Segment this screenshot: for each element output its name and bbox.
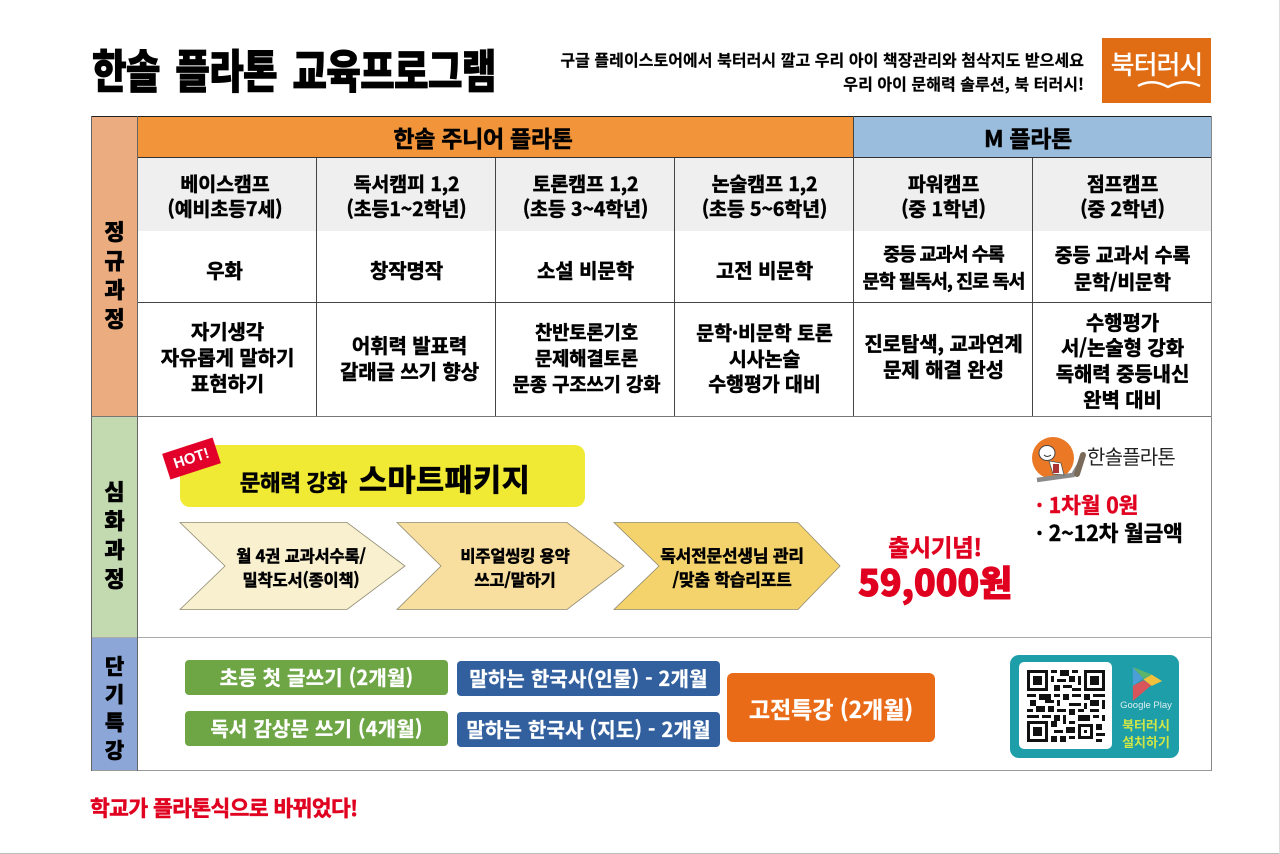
reading: 중등 교과서 수록 1: 문학 필독서, 진로 독서 bbox=[863, 268, 1024, 294]
chevron process bbox=[179, 522, 840, 610]
Google Play label: Google Play bbox=[1120, 700, 1172, 711]
row label: 단기특강: 단 bbox=[105, 650, 124, 680]
banner: 스마트패키지 bbox=[180, 445, 585, 507]
course: 말하는 한국사 지도: 말하는 한국사 (지도) - 2개월 bbox=[466, 714, 711, 743]
row label: 정규과정: 정 bbox=[104, 214, 125, 246]
banner: 스마트패키지: 문해력 강화 bbox=[240, 466, 347, 498]
badge: HOT!: HOT! bbox=[171, 445, 212, 472]
skills: 토론캠프: 찬반토론기호 bbox=[535, 318, 638, 345]
skills: 독서캠피: 어휘력 발표력 bbox=[352, 330, 467, 359]
skills: 논술캠프 bbox=[696, 317, 833, 397]
skills: 파워캠프: 문제 해결 완성 bbox=[883, 354, 1004, 383]
skills: 점프캠프: 서/논술형 강화 bbox=[1061, 332, 1184, 361]
logo: 한솔플라톤 mascot bbox=[1032, 437, 1086, 482]
promo text: 구글 플레이스토어에서 북터러시 깔고 우리 아이 책장관리와 첨삭지도 받으세요 bbox=[560, 47, 1084, 71]
reading: 우화: 우화 bbox=[206, 255, 243, 284]
skills: 토론캠프: 문종 구조쓰기 강화 bbox=[513, 370, 660, 397]
banner: 스마트패키지: 스마트패키지 bbox=[359, 456, 530, 500]
panel: regular courses bbox=[92, 117, 1211, 416]
camp: 파워캠프: (중 1학년) bbox=[901, 193, 986, 222]
skills: 독서캠피 bbox=[340, 330, 479, 384]
camp: 점프캠프: 점프캠프 bbox=[1087, 168, 1158, 197]
pricing notes bbox=[1036, 489, 1183, 548]
footer slogan: 학교가 플라톤식으로 바뀌었다! bbox=[90, 792, 358, 823]
skills: 논술캠프: 수행평가 대비 bbox=[708, 368, 821, 397]
promo text bbox=[560, 47, 1084, 95]
row label: 정규과정: 규 bbox=[104, 244, 125, 276]
camp: 파워캠프 bbox=[901, 168, 986, 222]
reading: 중등 교과서 수록 2: 중등 교과서 수록 bbox=[1055, 238, 1190, 268]
row label: 정규과정: 과 bbox=[104, 272, 125, 304]
camp: 토론캠프: (초등 3~4학년) bbox=[523, 193, 648, 222]
reading: 창작명작: 창작명작 bbox=[370, 255, 443, 284]
skills: 베이스캠프 bbox=[160, 316, 294, 397]
row label: 심화과정: 화 bbox=[104, 504, 125, 536]
camp: 파워캠프: 파워캠프 bbox=[908, 168, 979, 197]
label: 출시기념: 출시기념! bbox=[888, 529, 982, 563]
step 3 text: /맞춤 학습리포트 bbox=[672, 566, 792, 591]
row label: 정규과정 bbox=[91, 116, 138, 417]
badge: HOT! bbox=[162, 437, 221, 480]
skills: 파워캠프: 진로탐색, 교과연계 bbox=[864, 328, 1023, 357]
reading: 소설 비문학: 소설 비문학 bbox=[537, 255, 634, 284]
install text: 설치하기 bbox=[1122, 732, 1170, 751]
course: 초등 첫 글쓰기 bbox=[185, 660, 448, 695]
row label: 심화과정: 과 bbox=[104, 533, 125, 565]
chevron 2 bbox=[397, 522, 624, 610]
skills: 논술캠프: 문학·비문학 토론 bbox=[696, 317, 833, 346]
skills: 베이스캠프: 자유롭게 말하기 bbox=[161, 342, 294, 371]
install text: 북터러시 bbox=[1122, 715, 1170, 734]
camp: 독서캠피 bbox=[346, 168, 467, 222]
reading: 고전 비문학: 고전 비문학 bbox=[716, 255, 813, 284]
QR code bbox=[1019, 662, 1112, 749]
chevron 3 bbox=[614, 522, 840, 610]
logo: 북터러시 bbox=[1102, 38, 1211, 103]
skills: 점프캠프: 완벽 대비 bbox=[1083, 384, 1162, 413]
icon: Google Play bbox=[1132, 667, 1162, 701]
step 1 text: 월 4권 교과서수록/ bbox=[236, 543, 366, 567]
course: 고전특강 bbox=[727, 673, 935, 742]
install text bbox=[1122, 715, 1170, 751]
row label: 단기특강: 기 bbox=[105, 678, 124, 708]
header: M 플라톤 bbox=[854, 116, 1212, 158]
reading: 중등 교과서 수록 2: 문학/비문학 bbox=[1074, 266, 1171, 294]
logo: 북터러시: 북터러시 bbox=[1111, 44, 1202, 82]
course: 독서 감상문 쓰기 bbox=[185, 711, 448, 746]
step 2 text: 쓰고/말하기 bbox=[474, 567, 556, 591]
promo text: 우리 아이 문해력 솔루션, 북 터러시! bbox=[843, 71, 1084, 95]
skills: 토론캠프: 문제해결토론 bbox=[535, 344, 638, 371]
header: 한솔 주니어 플라톤: 한솔 주니어 플라톤 bbox=[393, 120, 573, 154]
skills: 베이스캠프: 표현하기 bbox=[191, 368, 264, 397]
header: M 플라톤: M 플라톤 bbox=[984, 120, 1072, 154]
camp: 논술캠프 bbox=[702, 168, 827, 222]
price callout bbox=[858, 529, 1012, 607]
step 1 text bbox=[236, 543, 366, 591]
camp: 베이스캠프: 베이스캠프 bbox=[180, 168, 270, 197]
camp: 점프캠프: (중 2학년) bbox=[1080, 193, 1165, 222]
skills row bbox=[160, 307, 1189, 413]
row label: 정규과정: 정 bbox=[104, 302, 125, 334]
course: 초등 첫 글쓰기: 초등 첫 글쓰기 (2개월) bbox=[220, 662, 413, 691]
step 2 text bbox=[460, 543, 570, 591]
logo text: 한솔플라톤: 한솔플라톤 bbox=[1087, 441, 1175, 470]
camp: 베이스캠프 bbox=[167, 168, 283, 222]
note: 2~12차: · 2~12차 월금액 bbox=[1036, 517, 1183, 548]
price: 59,000원 bbox=[858, 555, 1012, 607]
skills: 논술캠프: 시사논술 bbox=[729, 343, 800, 372]
row label: 단기특강: 특 bbox=[105, 706, 124, 736]
row label: 심화과정 bbox=[92, 417, 137, 637]
camp: 독서캠피: (초등1~2학년) bbox=[346, 193, 467, 222]
row label: 단기특강: 강 bbox=[105, 734, 124, 764]
course: 고전특강: 고전특강 (2개월) bbox=[749, 690, 913, 724]
header: 한솔 주니어 플라톤 bbox=[138, 116, 854, 158]
camp: 베이스캠프: (예비초등7세) bbox=[167, 193, 283, 222]
reading: 중등 교과서 수록 1: 중등 교과서 수록 bbox=[883, 240, 1004, 266]
step 3 text bbox=[660, 542, 804, 591]
title: 한솔 플라톤 교육프로그램 bbox=[92, 36, 496, 102]
skills: 파워캠프 bbox=[864, 328, 1023, 383]
camp: 논술캠프: (초등 5~6학년) bbox=[702, 193, 827, 222]
camp: 논술캠프: 논술캠프 1,2 bbox=[712, 168, 817, 197]
camp: 독서캠피: 독서캠피 1,2 bbox=[354, 168, 459, 197]
skills: 점프캠프: 수행평가 bbox=[1086, 307, 1159, 336]
skills: 토론캠프 bbox=[513, 318, 660, 397]
skills: 점프캠프 bbox=[1056, 307, 1189, 413]
reading: 중등 교과서 수록 1 bbox=[863, 240, 1024, 294]
note: 1차월: · 1차월 0원 bbox=[1036, 489, 1138, 520]
step 1 text: 밀착도서(종이책) bbox=[243, 567, 359, 591]
row label: 단기특강 bbox=[92, 638, 137, 770]
row label: 심화과정: 심 bbox=[104, 475, 125, 507]
row label: 심화과정: 정 bbox=[104, 562, 125, 594]
QR install card bbox=[1010, 655, 1179, 758]
skills: 베이스캠프: 자기생각 bbox=[191, 316, 264, 345]
camp: 점프캠프 bbox=[1080, 168, 1165, 222]
camp: 토론캠프 bbox=[523, 168, 648, 222]
camp: 토론캠프: 토론캠프 1,2 bbox=[533, 168, 638, 197]
reading row bbox=[206, 238, 1190, 294]
step 2 text: 비주얼씽킹 용약 bbox=[460, 543, 570, 567]
camp names row bbox=[138, 158, 1212, 231]
reading: 중등 교과서 수록 2 bbox=[1055, 238, 1190, 294]
step 3 text: 독서전문선생님 관리 bbox=[660, 542, 804, 567]
chevron 1 bbox=[180, 522, 405, 610]
course: 말하는 한국사 인물: 말하는 한국사(인물) - 2개월 bbox=[469, 663, 708, 692]
skills: 점프캠프: 독해력 중등내신 bbox=[1056, 358, 1189, 387]
course: 독서 감상문 쓰기: 독서 감상문 쓰기 (4개월) bbox=[210, 713, 423, 742]
skills: 독서캠피: 갈래글 쓰기 향상 bbox=[340, 356, 479, 384]
